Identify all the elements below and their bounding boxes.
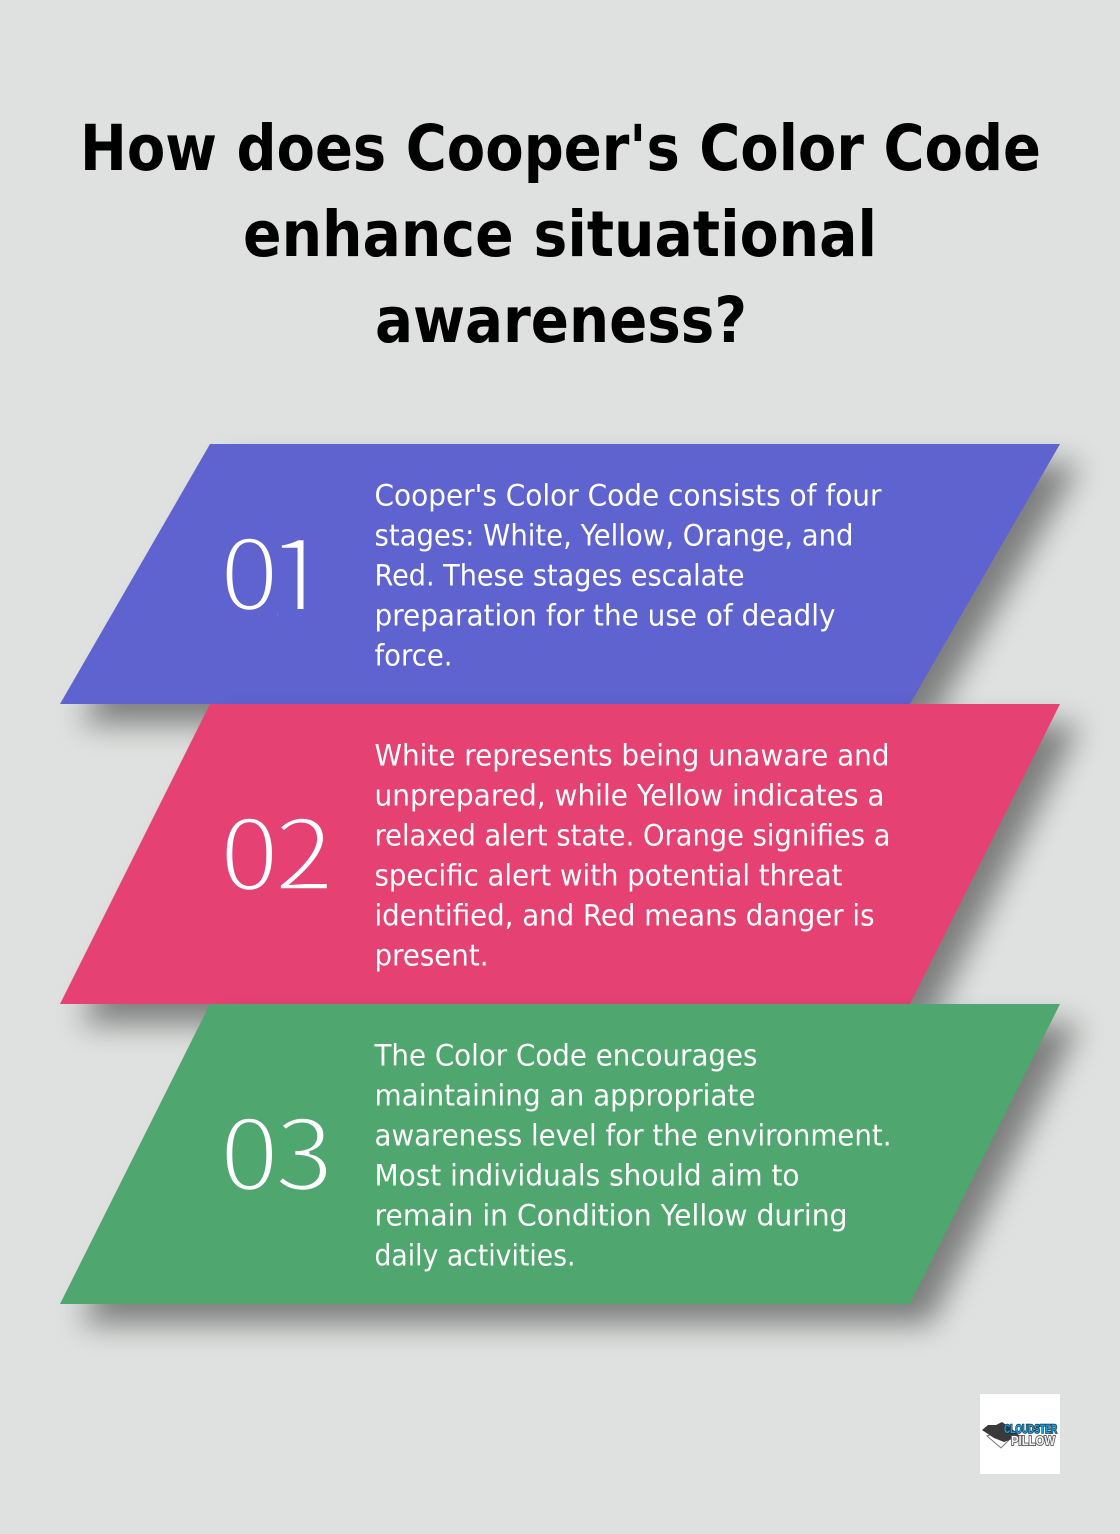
text: step 01 description: stages: White, Yellow, Orange, and [374,518,854,552]
title [80,112,1041,357]
panel: step 01 [60,444,1080,724]
text: step 02 description: present. [374,938,488,972]
logo: Cloudster Pillow: CLOUDSTER [1004,1422,1057,1436]
text: step 01 description: preparation for the use of deadly [374,598,836,632]
number 02: 02 [219,777,334,919]
text: step 03 description: The Color Code encourages [374,1038,758,1072]
number 01 [219,491,336,649]
text: step 01 description [374,478,882,672]
title: enhance situational [243,198,877,271]
text: step 02 description: White represents being unaware and [374,738,890,772]
logo: Cloudster Pillow: PILLOW [1011,1433,1056,1448]
text: step 03 description [374,1038,892,1272]
text: step 03 description: maintaining an appropriate [374,1078,756,1112]
number 01: 1 [265,491,331,649]
text: step 02 description: unprepared, while Yellow indicates a [374,778,884,812]
text: step 03 description: awareness level for the environment. [374,1118,892,1152]
panel: step 02 [60,704,1080,1024]
text: step 01 description: force. [374,638,452,672]
text: step 03 description: remain in Condition Yellow during [374,1198,848,1232]
number 01: 0 [219,497,279,639]
logo: Cloudster Pillow [980,1394,1060,1474]
text: step 02 description: specific alert with potential threat [374,858,842,892]
text: step 01 description: Cooper's Color Code consists of four [374,478,882,512]
title: awareness? [375,284,747,357]
text: step 02 description [374,738,890,972]
text: step 02 description: identified, and Red means danger is [374,898,874,932]
number 03: 03 [219,1077,334,1219]
text: step 03 description: daily activities. [374,1238,576,1272]
panel: step 03 [60,1004,1080,1324]
text: step 01 description: Red. These stages escalate [374,558,744,592]
text: step 02 description: relaxed alert state. Orange signifies a [374,818,890,852]
text: step 03 description: Most individuals should aim to [374,1158,800,1192]
